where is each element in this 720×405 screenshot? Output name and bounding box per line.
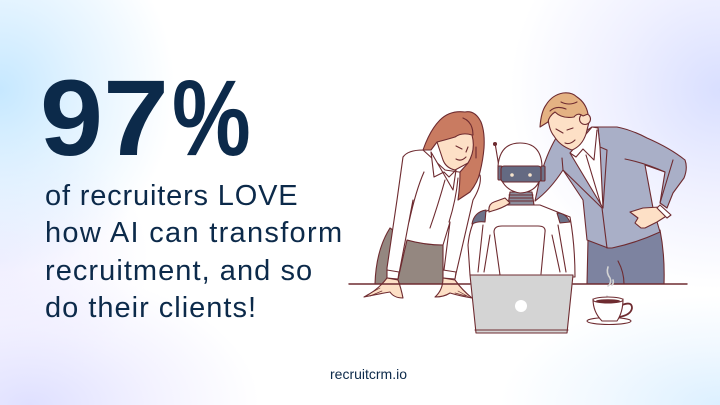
woman shirt bbox=[387, 150, 480, 279]
steam bbox=[607, 267, 613, 300]
man jacket bbox=[535, 127, 686, 248]
woman bbox=[364, 112, 484, 298]
laptop bbox=[470, 275, 573, 333]
headline statistic: % bbox=[172, 57, 251, 178]
woman hands bbox=[364, 278, 472, 298]
body text bbox=[45, 180, 343, 324]
man hair bbox=[540, 93, 588, 127]
woman face bbox=[437, 130, 476, 170]
headline statistic: 7 bbox=[103, 57, 169, 178]
robot visor bbox=[501, 166, 541, 182]
footer url: recruitcrm.io bbox=[330, 366, 407, 382]
body text: recruitment, and so bbox=[45, 255, 313, 287]
woman hair bbox=[423, 112, 484, 200]
robot bbox=[468, 142, 575, 277]
robot shoulders bbox=[472, 210, 570, 224]
coffee cup bbox=[587, 267, 632, 324]
man head bbox=[548, 100, 590, 150]
headline statistic bbox=[40, 57, 251, 178]
man bbox=[535, 93, 686, 284]
robot neck bbox=[508, 192, 534, 205]
headline statistic: 9 bbox=[40, 57, 103, 178]
robot head bbox=[498, 143, 542, 193]
body text: of recruiters LOVE bbox=[45, 180, 298, 212]
man trousers bbox=[587, 230, 664, 284]
woman skirt bbox=[375, 228, 443, 284]
body text: do their clients! bbox=[45, 292, 257, 324]
man's hand on robot bbox=[489, 198, 510, 212]
body text: how AI can transform bbox=[45, 217, 343, 249]
robot ears bbox=[498, 166, 502, 180]
man shirt bbox=[570, 127, 603, 208]
man hand on hip bbox=[630, 207, 668, 228]
robot body bbox=[468, 205, 575, 277]
robot antenna bbox=[495, 143, 499, 167]
table line bbox=[349, 283, 687, 285]
